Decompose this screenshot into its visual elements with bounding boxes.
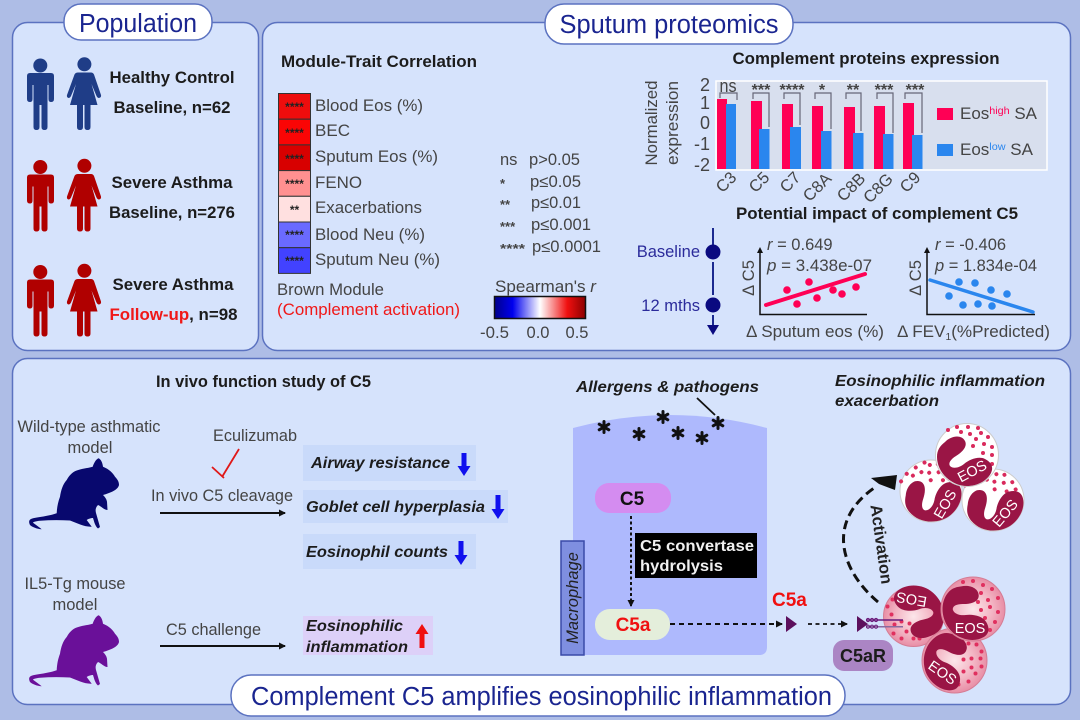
text: healthy control: Baseline, n=62 [114, 99, 230, 117]
scatter plot: c5 vs sputum eos: Δ C5 [740, 260, 758, 296]
arrow: c5 challenge: C5 challenge [166, 621, 261, 639]
cell: eosinophil left [896, 451, 970, 534]
label: allergens and pathogens [575, 379, 759, 415]
x axis labels: C5 [746, 169, 773, 196]
y axis title: Normalized [643, 80, 661, 166]
x axis labels: C9 [897, 169, 924, 196]
arrow: c5a secreted [670, 623, 782, 625]
caption: brown module [277, 281, 460, 319]
icon: severe asthma follow-up people [27, 264, 101, 336]
text: wild-type asthmatic model: Wild-type asthmatic [18, 418, 160, 436]
cell: eosinophil right [958, 461, 1032, 543]
label: c5 convertase hydrolysis: C5 convertase [640, 538, 754, 555]
y axis ticks: 2 [700, 75, 710, 95]
heatmap trait labels: Sputum Eos (%) [315, 148, 438, 166]
scatter plot: c5 vs fev1 [897, 236, 1050, 343]
legend: eos high and low [937, 105, 1037, 159]
panel: in vivo and mechanism [12, 358, 1070, 704]
cell: eosinophil right: EOS [990, 497, 1022, 531]
diagram: macrophage [561, 379, 767, 655]
cell: activated eosinophil right: EOS [955, 621, 985, 637]
heading: module-trait correlation: Module-Trait Correlation [281, 53, 477, 71]
heading: potential impact of complement c5: Potential impact of complement C5 [736, 205, 1018, 223]
heading pill: sputum proteomics [545, 4, 793, 44]
arrow: c5a to receptor [808, 623, 847, 625]
cell: activated eosinophil bottom: EOS [925, 658, 959, 689]
pill: c5 [595, 483, 671, 513]
significance labels: ** [847, 82, 860, 99]
title pill: complement c5 amplifies eosinophilic inflammation [231, 675, 845, 716]
cell: activated eosinophil bottom [913, 625, 987, 698]
result: eosinophilic inflammation: inflammation [306, 639, 408, 656]
legend: significance levels: p≤0.001 [531, 216, 591, 234]
scatter plot: c5 vs sputum eos: p = 3.438e-07 [766, 257, 872, 275]
legend: significance levels: p≤0.05 [530, 173, 581, 191]
text: eosinophilic inflammation exacerbation [835, 373, 1045, 410]
legend: significance levels: ns [500, 151, 517, 169]
cell: activated eosinophil left [884, 579, 952, 646]
legend: significance levels: * [500, 176, 506, 191]
result: airway resistance: Airway resistance [310, 455, 450, 472]
text: eculizumab: Eculizumab [213, 427, 297, 445]
heatmap: module-trait correlation: **** [285, 152, 304, 166]
text: severe asthma follow-up [110, 276, 238, 324]
heading pill: sputum proteomics: Sputum proteomics [560, 11, 778, 39]
pill: c5: C5 [620, 489, 645, 510]
pill: c5a: C5a [616, 615, 651, 636]
heatmap trait labels: BEC [315, 122, 350, 140]
color bar: spearman's r: Spearman's r [495, 278, 598, 296]
legend: eos high and low: Eos [960, 141, 988, 159]
x axis labels: C8B [834, 170, 869, 205]
caption: brown module: (Complement activation) [277, 301, 460, 319]
label: c5 convertase hydrolysis [635, 533, 757, 578]
cell: eosinophil top: EOS [955, 458, 990, 486]
legend: significance levels: p≤0.0001 [532, 238, 601, 256]
color bar: spearman's r: -0.5 [480, 324, 509, 342]
x axis labels: C7 [777, 169, 804, 196]
arrow: activation [843, 475, 897, 602]
x axis labels: C8G [860, 170, 897, 207]
legend: significance levels: p≤0.01 [531, 194, 581, 212]
legend: significance levels [500, 151, 601, 256]
legend: significance levels: p>0.05 [529, 151, 580, 169]
scatter plot: c5 vs fev1: Δ C5 [907, 260, 925, 296]
caption: brown module: Brown Module [277, 281, 384, 299]
cell: eosinophil left: EOS [931, 487, 960, 522]
result: eosinophil counts [303, 534, 476, 569]
color bar: spearman's r: 0.5 [566, 324, 588, 342]
label: macrophage: Macrophage [564, 552, 582, 644]
heatmap trait labels: Blood Neu (%) [315, 226, 425, 244]
icon: healthy control people [27, 57, 101, 130]
icon: c5a receptor [857, 616, 903, 632]
label: allergens and pathogens: Allergens & pathogens [575, 379, 759, 396]
scatter plot: c5 vs fev1: 1 [945, 332, 952, 343]
legend: significance levels: *** [500, 219, 516, 234]
cell: eosinophil top [936, 424, 998, 486]
legend: eos high and low: high [989, 105, 1010, 117]
panel background: bottom [12, 358, 1070, 704]
heatmap: module-trait correlation: **** [285, 228, 304, 242]
macrophage cell [573, 415, 767, 655]
heatmap: module-trait correlation: **** [285, 100, 304, 114]
panel: sputum proteomics [262, 4, 1070, 350]
icon: c5a ligand with label: C5a [772, 590, 807, 611]
scatter plot: c5 vs fev1: r = -0.406 [935, 236, 1006, 254]
heatmap trait labels: Exacerbations [315, 199, 422, 217]
heatmap: module-trait correlation: **** [285, 254, 304, 268]
text: severe asthma baseline: Baseline, n=276 [109, 204, 235, 222]
scatter plot: c5 vs sputum eos [740, 236, 884, 341]
heatmap trait labels: Blood Eos (%) [315, 97, 423, 115]
y axis ticks: 1 [700, 93, 710, 113]
panel background: population [12, 22, 258, 350]
arrow: in vivo c5 cleavage: In vivo C5 cleavage [151, 487, 293, 505]
legend: significance levels: **** [500, 241, 526, 256]
heading pill: population [64, 4, 212, 40]
icon: purple mouse [29, 615, 119, 686]
heatmap trait labels: FENO [315, 174, 362, 192]
result: eosinophilic inflammation: Eosinophilic [306, 618, 403, 635]
y axis title [643, 80, 682, 166]
text: healthy control [110, 69, 234, 117]
text: severe asthma follow-up: Severe Asthma [112, 276, 234, 294]
y axis ticks: -1 [694, 134, 710, 154]
title pill: complement c5 amplifies eosinophilic inflammation: Complement C5 amplifies eosinophilic inflammation [251, 683, 832, 711]
significance labels: *** [752, 82, 771, 99]
heatmap trait labels: Sputum Neu (%) [315, 251, 440, 269]
bar chart: complement proteins expression [643, 75, 1047, 207]
heatmap: module-trait correlation: **** [285, 126, 304, 140]
y axis ticks [694, 75, 710, 175]
text: il5-tg mouse model: model [53, 596, 97, 614]
significance labels: *** [906, 82, 925, 99]
significance labels: **** [780, 82, 805, 99]
arrow: c5 challenge [160, 621, 285, 646]
icons: allergen particles [599, 412, 723, 444]
x axis labels: C3 [713, 169, 740, 196]
cell: activated eosinophil right [931, 577, 1005, 649]
significance labels: ns [720, 76, 736, 96]
panel: population [12, 4, 258, 350]
timeline: baseline to 12 months: Baseline [637, 243, 700, 261]
legend: eos high and low: low [989, 141, 1006, 153]
blue bars [726, 104, 922, 169]
heatmap: module-trait correlation: **** [285, 177, 304, 191]
y axis title: expression [664, 81, 682, 165]
icon: severe asthma baseline people [27, 159, 101, 232]
timeline: baseline to 12 months: 12 mths [641, 297, 700, 315]
text: eosinophilic inflammation exacerbation: Eosinophilic inflammation [835, 373, 1045, 390]
heading pill: population: Population [79, 10, 197, 38]
pill: c5ar: C5aR [840, 646, 886, 666]
pill: c5a [595, 609, 670, 640]
plot background [716, 81, 1047, 170]
text: healthy control: Healthy Control [110, 69, 234, 87]
significance labels: *** [875, 82, 894, 99]
icon: inhibition mark [212, 449, 239, 478]
scatter plot: c5 vs fev1: (%Predicted) [951, 323, 1050, 341]
scatter plot: c5 vs sputum eos: r = 0.649 [767, 236, 833, 254]
y axis ticks: 0 [700, 113, 710, 133]
label: macrophage [561, 541, 584, 655]
result: eosinophil counts: Eosinophil counts [306, 544, 448, 561]
label: c5 convertase hydrolysis: hydrolysis [640, 558, 723, 575]
heading: complement proteins expression: Complement proteins expression [732, 50, 1000, 68]
heading: in vivo function study of c5: In vivo function study of C5 [156, 373, 371, 391]
panel background: sputum proteomics [262, 22, 1070, 350]
legend: eos high and low: SA [1010, 105, 1037, 123]
result: goblet cell hyperplasia [303, 490, 508, 523]
text: wild-type asthmatic model: model [68, 439, 112, 457]
scatter plot: c5 vs fev1: p = 1.834e-04 [934, 257, 1037, 275]
cell: activated eosinophil left: EOS [895, 588, 928, 609]
icon: navy mouse [29, 458, 119, 529]
significance brackets [720, 93, 922, 133]
result: eosinophilic inflammation [303, 616, 433, 656]
legend: eos high and low: SA [1006, 141, 1033, 159]
significance labels: * [819, 82, 826, 99]
text: wild-type asthmatic model [18, 418, 160, 457]
text: severe asthma baseline: Severe Asthma [112, 174, 233, 192]
color bar: spearman's r: 0.0 [527, 324, 549, 342]
pink bars [717, 99, 914, 169]
x axis labels: C8A [800, 170, 835, 205]
legend: eos high and low: Eos [960, 105, 988, 123]
heatmap trait labels [315, 97, 440, 269]
text: eosinophilic inflammation exacerbation: exacerbation [835, 393, 939, 410]
text: severe asthma follow-up: Follow-up, n=98 [110, 306, 238, 324]
timeline: baseline to 12 months [637, 228, 720, 335]
y axis ticks: -2 [694, 155, 710, 175]
heatmap: module-trait correlation [278, 94, 310, 273]
heatmap: module-trait correlation: ** [290, 203, 299, 217]
text: il5-tg mouse model [24, 575, 126, 614]
significance labels [720, 76, 925, 99]
icon: c5a ligand with label [772, 590, 807, 632]
pill: c5ar [833, 640, 893, 671]
result: airway resistance [303, 445, 476, 481]
legend: significance levels: ** [500, 197, 511, 212]
scatter plot: c5 vs sputum eos: Δ Sputum eos (%) [746, 323, 884, 341]
text: il5-tg mouse model: IL5-Tg mouse [24, 575, 126, 593]
arrow: c5 to c5a [630, 516, 632, 606]
arrow: activation: Activation [866, 503, 895, 585]
color bar: spearman's r [480, 278, 598, 342]
text: severe asthma baseline [109, 174, 235, 222]
result: goblet cell hyperplasia: Goblet cell hyperplasia [306, 499, 485, 516]
scatter plot: c5 vs fev1: Δ FEV [897, 323, 944, 341]
x axis labels [713, 169, 924, 207]
